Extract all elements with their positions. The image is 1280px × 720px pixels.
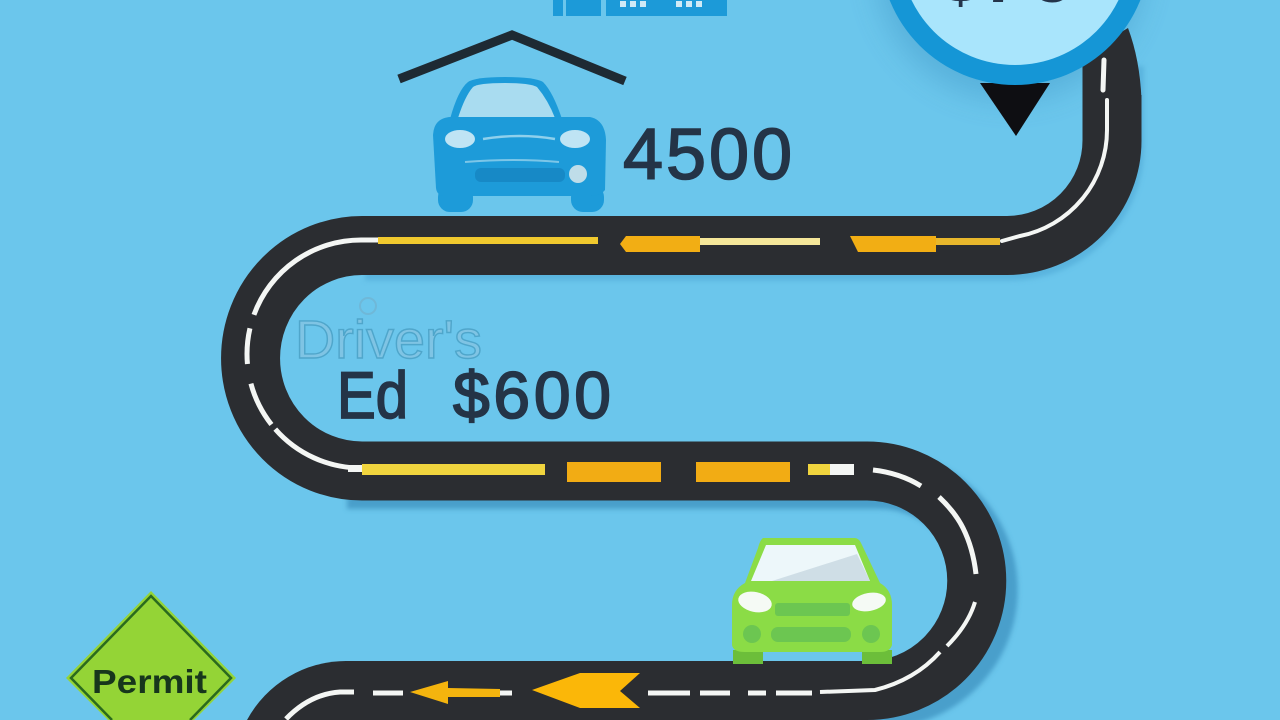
top building icon [553, 0, 727, 16]
white lane markings: top bend [1002, 60, 1107, 241]
white lane markings: bottom left [286, 692, 512, 719]
label: Ed: Ed [337, 358, 408, 432]
yellow lane markings: upper straight [378, 236, 1000, 252]
amount: $600: $600 [453, 358, 611, 432]
road shadow [347, 66, 1115, 700]
small yellow arrow [410, 681, 500, 704]
white lane markings: left bend [247, 240, 378, 468]
winding road [247, 28, 1142, 720]
pin shadow [875, 0, 1145, 100]
sign text: Permit [92, 663, 207, 700]
amount: 4500: 4500 [623, 115, 792, 195]
location pin [880, 0, 1150, 136]
large yellow arrow [532, 673, 640, 708]
icon: blue car [433, 77, 606, 212]
yellow lane markings: middle straight [348, 462, 854, 482]
permit road sign [66, 591, 236, 720]
white lane markings: right bend [648, 470, 976, 693]
icon: green car [732, 538, 892, 664]
garage roof [399, 35, 625, 81]
label: Driver's: Driver's [295, 310, 482, 370]
